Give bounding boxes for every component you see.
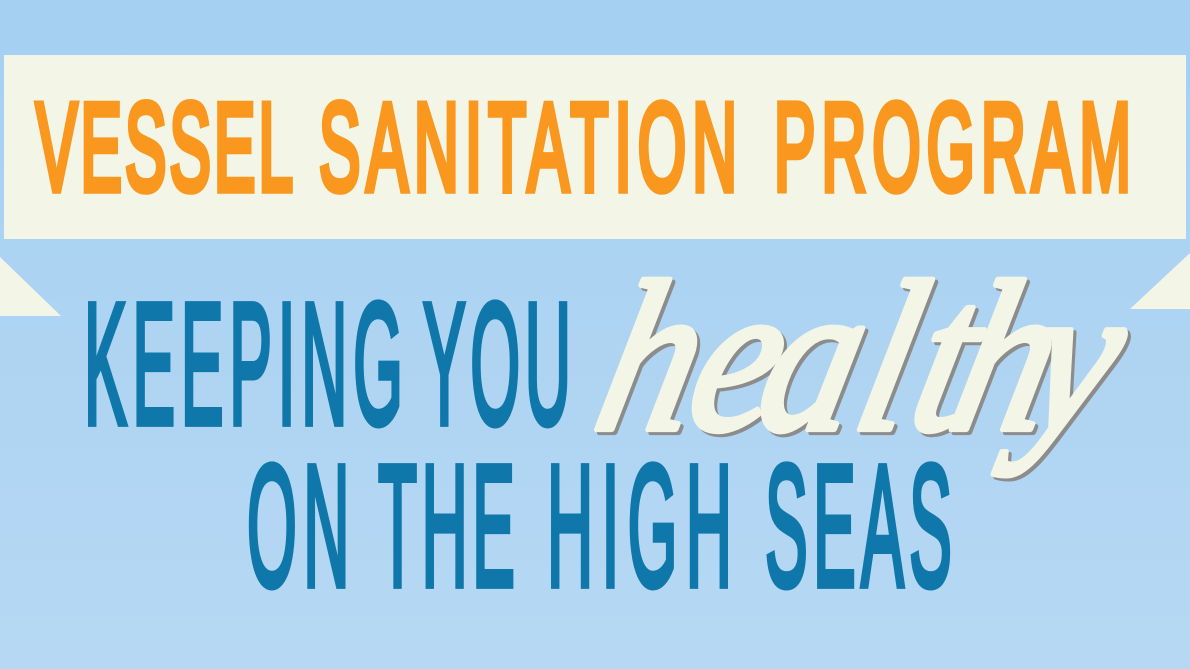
- heading: On the high seas: [247, 429, 952, 623]
- banner panel: [4, 55, 1186, 239]
- title: Vessel Sanitation Program: SANITATION: [319, 77, 737, 217]
- heading: On the high seas: HIGH: [547, 429, 732, 623]
- title: Vessel Sanitation Program: PROGRAM: [774, 77, 1131, 217]
- heading: Keeping you: [84, 267, 571, 461]
- heading: healthy script with shadow: healthy: [582, 242, 1151, 479]
- banner right fold: [1130, 253, 1190, 309]
- heading: On the high seas: ON: [247, 429, 349, 623]
- banner left fold: [0, 257, 61, 316]
- heading: healthy script with shadow: healthy: [579, 239, 1148, 476]
- heading: Keeping you: YOU: [423, 267, 571, 461]
- title: Vessel Sanitation Program: VESSEL: [36, 77, 293, 217]
- banner: [0, 55, 1190, 316]
- heading: On the high seas: THE: [378, 429, 515, 623]
- heading: Keeping you: KEEPING: [84, 267, 403, 461]
- heading: On the high seas: SEAS: [765, 429, 952, 623]
- title: Vessel Sanitation Program: [36, 77, 1131, 217]
